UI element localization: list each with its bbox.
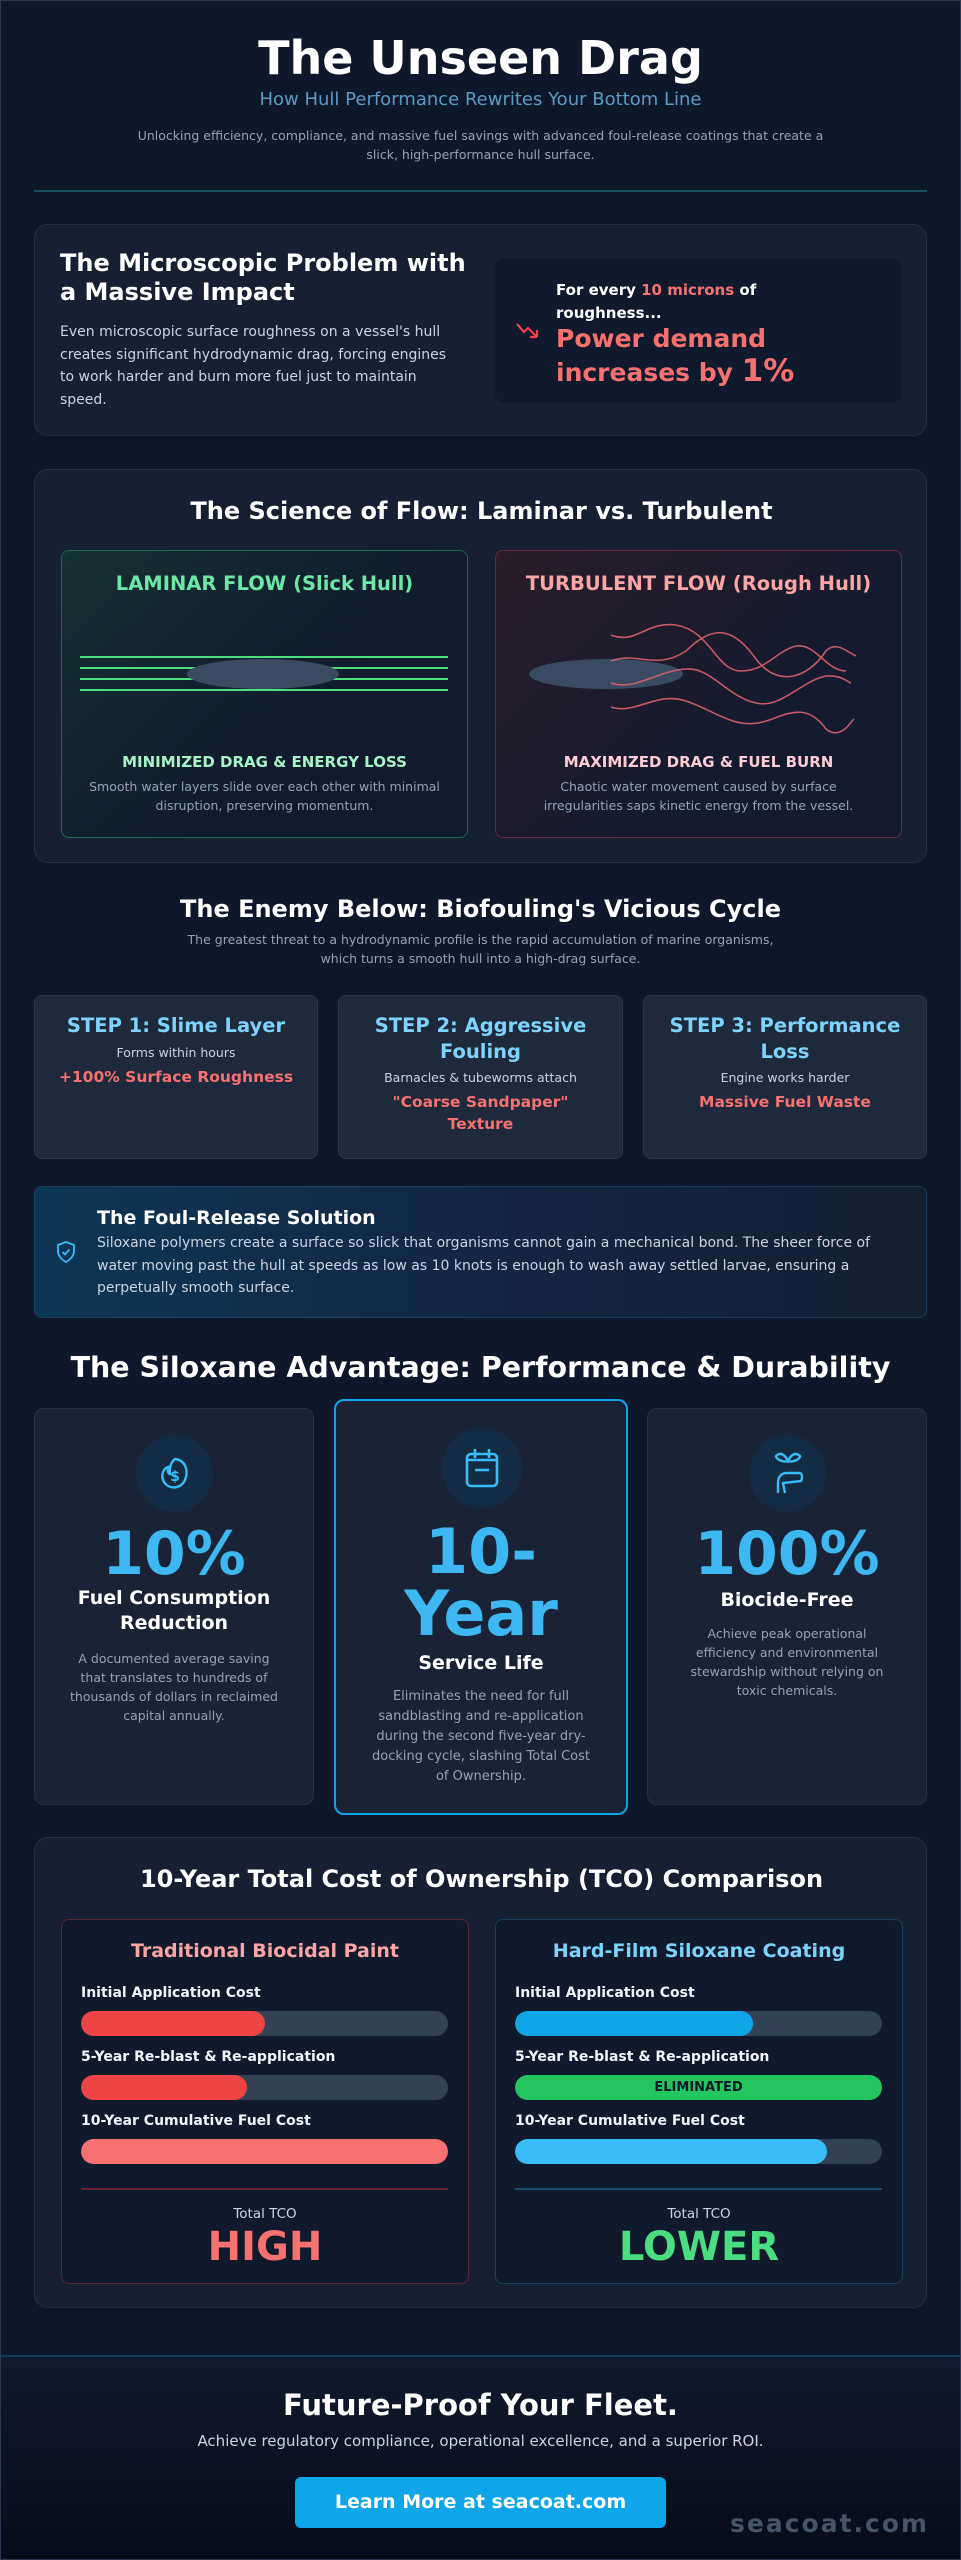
result: LOWER: LOWER [619,2224,779,2270]
stat card: 10-year: Year [404,1577,558,1650]
card: traditional paint: Initial Application Cost [81,1985,261,2001]
callout: foul-release solution [34,1186,927,1318]
panel: TCO comparison [34,1837,927,2308]
step card 1: +100% Surface Roughness [59,1068,293,1086]
bar: fuel cost [515,2139,882,2164]
stat callout [495,259,901,403]
card: traditional paint: Total TCO [233,2206,297,2222]
bar: eliminated: ELIMINATED [654,2080,743,2095]
heading: The Science of Flow: Laminar vs. Turbulent [190,497,773,525]
icon: coin [136,1435,213,1512]
step card 3: STEP 3: Performance Loss [670,1014,900,1063]
step card 1: Forms within hours [116,1045,236,1060]
card: turbulent: MAXIMIZED DRAG & FUEL BURN [564,753,833,771]
step card 2: "Coarse Sandpaper" Texture [392,1093,568,1133]
card: siloxane coating: 5-Year Re-blast & Re-application [515,2049,769,2065]
heading: The Microscopic Problem with a Massive Impact [60,249,466,306]
stat card: 10-year: 10- [425,1515,537,1588]
stat callout: Power demand increases by 1% [556,324,794,389]
card: turbulent: TURBULENT FLOW (Rough Hull) [526,572,871,595]
icon: shield [57,1241,75,1263]
footer text: Achieve regulatory compliance, operational excellence, and a superior ROI. [197,2432,764,2450]
heading: siloxane advantage: The Siloxane Advantage: Performance & Durability [71,1351,890,1384]
diagram: laminar lines [80,656,448,691]
card: turbulent [495,550,902,838]
card: traditional paint: Traditional Biocidal Paint [131,1940,399,1962]
text: enemy intro: The greatest threat to a hydrodynamic profile is the rapid accumulation of marine organisms, which turns a smooth hull into a high-drag surface. [188,932,773,966]
bar: initial cost [81,2011,448,2036]
card: laminar: LAMINAR FLOW (Slick Hull) [116,572,413,595]
panel: science of flow [34,469,927,863]
diagram: turbulent waves [529,624,856,734]
stat card: 10% fuel: 10% [102,1519,246,1589]
paragraph: Even microscopic surface roughness on a vessel's hull creates significant hydrodynamic drag, forcing engines to work harder and burn more fuel just to maintain speed. [60,324,446,408]
heading: the enemy below: The Enemy Below: Biofouling's Vicious Cycle [180,895,781,923]
step card 1 [34,995,318,1159]
bar: eliminated [515,2075,882,2100]
card: turbulent: Chaotic water movement caused by surface irregularities saps kinetic energy from the vessel. [544,779,853,813]
card: siloxane coating: Initial Application Cost [515,1985,695,2001]
stat card: 10% fuel: A documented average saving that translates to hundreds of thousands of dollars in reclaimed capital annually. [70,1651,278,1723]
subtitle: How Hull Performance Rewrites Your Bottom Line [260,89,701,110]
step card 3: Massive Fuel Waste [699,1093,871,1111]
bar: re-blast [81,2075,448,2100]
bar: fuel cost [81,2139,448,2164]
title: The Unseen Drag [258,31,703,85]
button: Learn More at seacoat.com [335,2491,626,2513]
card: laminar [61,550,468,838]
panel: microscopic problem [34,224,927,436]
stat card: 10-year: Service Life [418,1652,544,1674]
stat callout: For every 10 microns of roughness... [556,281,756,322]
card: siloxane coating: 10-Year Cumulative Fuel Cost [515,2113,745,2129]
callout: foul-release solution: Siloxane polymers create a surface so slick that organisms cannot gain a mechanical bond. The sheer force of water moving past the hull at speeds as low as 10 knots is enough to wash away settled larvae, ensuring a perpetually smooth surface. [97,1235,870,1296]
stat card: 10-year: Eliminates the need for full sandblasting and re-application during the second five-year dry-docking cycle, slashing Total Cost of Ownership. [372,1689,590,1784]
footer [0,2355,961,2560]
step card 1: STEP 1: Slime Layer [67,1014,285,1037]
icon: hand/leaf [749,1435,826,1512]
icon: coin: $ [170,1469,180,1485]
icon: calendar [442,1428,522,1508]
card: siloxane coating: Total TCO [667,2206,731,2222]
stat card: biocide-free: 100% [694,1519,880,1589]
stat card: 10% fuel [34,1408,314,1805]
step card 2 [338,995,623,1159]
card: laminar: Smooth water layers slide over each other with minimal disruption, preserving momentum. [89,779,440,813]
card: siloxane coating [495,1919,903,2284]
stat card: biocide-free [647,1408,927,1805]
card: laminar: MINIMIZED DRAG & ENERGY LOSS [122,753,407,771]
footer heading: Future-Proof Your Fleet. [283,2388,678,2422]
card: traditional paint: 5-Year Re-blast & Re-application [81,2049,335,2065]
card: siloxane coating: Hard-Film Siloxane Coating [553,1940,845,1962]
card: traditional paint: 10-Year Cumulative Fuel Cost [81,2113,311,2129]
stat card: 10-year [334,1399,628,1815]
card: traditional paint [61,1919,469,2284]
stat card: biocide-free: Biocide-Free [720,1589,854,1611]
button [295,2477,666,2528]
step card 2: Barnacles & tubeworms attach [384,1070,577,1085]
step card 3: Engine works harder [721,1070,849,1085]
stat card: 10% fuel: Fuel Consumption Reduction [78,1587,270,1634]
bar: initial cost [515,2011,882,2036]
step card 2: STEP 2: Aggressive Fouling [375,1014,586,1063]
callout: foul-release solution: The Foul-Release Solution [97,1207,376,1229]
stat card: biocide-free: Achieve peak operational efficiency and environmental stewardship without relying on toxic chemicals. [691,1626,883,1698]
watermark: seacoat.com [730,2509,929,2538]
result: HIGH: HIGH [208,2224,322,2270]
heading: 10-Year Total Cost of Ownership (TCO) Comparison [140,1865,823,1893]
intro text: Unlocking efficiency, compliance, and massive fuel savings with advanced foul-release coatings that create a slick, high-performance hull surface. [138,128,823,162]
step card 3 [643,995,927,1159]
icon: trend down arrow [516,323,538,338]
